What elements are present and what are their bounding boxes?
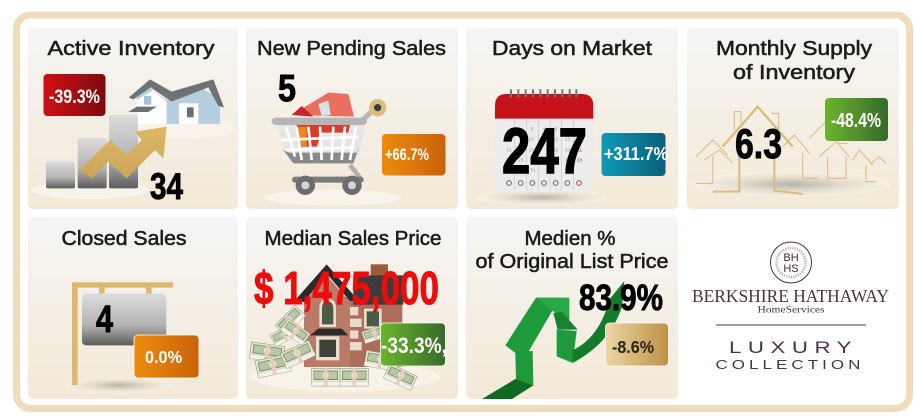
badge: -33.3%: -33.3%, [381, 333, 447, 358]
icon: calendar: 31 [530, 167, 536, 173]
value: 83.9%: 83.9% [579, 277, 663, 318]
heading: Monthly Supply of Inventory: Monthly Supply [716, 37, 873, 60]
badge: 0.0% [134, 335, 199, 378]
panel: Days on Market [466, 27, 678, 209]
icon: calendar: 15 [506, 147, 512, 153]
icon: green house arrow [482, 281, 624, 399]
badge: -48.4%: -48.4% [831, 110, 881, 132]
value: 5: 5 [278, 68, 296, 110]
value: 247: 247 [502, 115, 587, 187]
badge: +311.7%: +311.7% [604, 143, 668, 164]
badge: -39.3% [44, 74, 106, 116]
panel: New Pending Sales [246, 27, 458, 209]
badge: +66.7%: +66.7% [385, 146, 429, 164]
icon: calendar: 28 [577, 158, 582, 164]
icon: calendar: 5 [555, 126, 558, 132]
badge: +311.7% [602, 133, 668, 176]
icon: calendar: 19 [553, 147, 558, 153]
icon: calendar: 20 [565, 147, 570, 153]
heading: Days on Market: Days on Market [492, 37, 652, 60]
icon: brick house with money [249, 264, 440, 392]
icon: calendar: 17 [529, 147, 534, 153]
badge: 0.0%: 0.0% [145, 347, 182, 367]
panel: Monthly Supply of Inventory [687, 27, 899, 209]
icon: shopping cart with house [264, 93, 401, 206]
icon: house and rising bars [32, 79, 236, 199]
wordmark: Berkshire Hathaway: BERKSHIRE HATHAWAY [692, 286, 889, 306]
icon: calendar: 12 [553, 136, 558, 142]
logo seal: BHHS: HS [783, 263, 799, 275]
badge: -39.3%: -39.3% [49, 87, 100, 108]
heading: Medien % of Original List Price: Medien % [524, 227, 616, 250]
logo seal: BHHS: BH [783, 252, 799, 264]
badge: -33.3% [380, 323, 447, 366]
value: 6.3: 6.3 [735, 120, 782, 167]
wordmark: Collection: COLLECTION [716, 358, 864, 372]
panel: Monthly Supply of Inventory: of Inventory [733, 61, 856, 84]
value: $ 1,475,000: $ 1,475,000 [254, 262, 439, 314]
value: 4: 4 [96, 299, 113, 341]
icon: calendar [477, 90, 607, 205]
icon: calendar: 3 [531, 126, 534, 132]
icon: calendar: 10 [529, 136, 534, 142]
icon: outlined gold houses [692, 107, 890, 197]
wordmark: Luxury: LUXURY [729, 338, 858, 357]
icon: calendar: 27 [565, 158, 570, 164]
panel: Median Sales Price [246, 217, 458, 399]
wordmark: HomeServices: HomeServices [758, 306, 825, 316]
logo seal: BHHS [770, 242, 812, 283]
panel: Median % of Original List Price: of Original List Price [476, 250, 668, 273]
heading: Active Inventory: Active Inventory [48, 37, 215, 60]
panel: Median % of Original List Price [466, 217, 678, 399]
icon: calendar: 23 [518, 158, 524, 164]
panel: Active Inventory [28, 27, 238, 209]
badge: -8.6% [606, 323, 668, 366]
badge: +66.7% [382, 134, 446, 176]
badge: -8.6%: -8.6% [612, 337, 654, 357]
icon: calendar: 13 [565, 136, 570, 142]
icon: calendar: 4 [543, 126, 546, 132]
heading: Median Sales Price: Median Sales Price [264, 227, 442, 250]
icon: hanging sign [65, 282, 173, 393]
panel: Closed Sales [28, 217, 238, 399]
logo: Berkshire Hathaway HomeServices Luxury Collection [692, 242, 889, 372]
badge: -48.4% [825, 98, 888, 141]
heading: New Pending Sales: New Pending Sales [257, 37, 446, 60]
value: 34: 34 [150, 166, 183, 207]
icon: calendar: 21 [577, 147, 582, 153]
heading: Closed Sales: Closed Sales [62, 227, 186, 250]
